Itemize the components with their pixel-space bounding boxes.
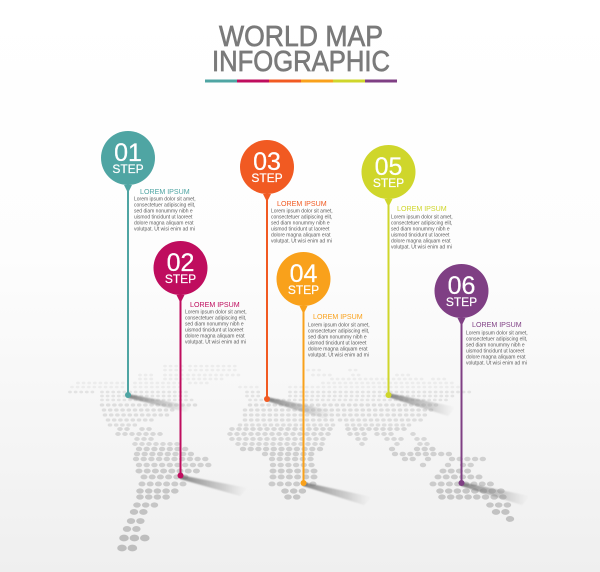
pin 05: STEP — [373, 176, 404, 190]
pin 06: STEP — [446, 295, 477, 309]
text block 04 — [308, 313, 370, 359]
text block 04: consectetuer adipiscing elit, — [308, 329, 369, 335]
text block 01 — [134, 188, 196, 233]
text block 04: Lorem ipsum dolor sit amet, — [308, 323, 370, 329]
text block 05: uismod tincidunt ut laoreet — [391, 233, 450, 239]
text block 01: sed diam nonummy nibh e — [134, 209, 193, 215]
text block 02: volutpat. Ut wisi enim ad mi — [185, 340, 246, 346]
text block 01: Lorem ipsum dolor sit amet, — [134, 197, 196, 203]
text block 01: LOREM IPSUM — [140, 188, 190, 196]
pin 02: STEP — [165, 272, 196, 286]
text block 04: LOREM IPSUM — [313, 313, 363, 321]
pin 06: 06 — [448, 272, 475, 300]
text block 02: dolore magna aliquam erat — [185, 334, 245, 340]
pin 05: 05 — [375, 153, 402, 181]
text block 02: Lorem ipsum dolor sit amet, — [185, 310, 247, 316]
text block 04: volutpat. Ut wisi enim ad mi — [308, 353, 369, 359]
text block 04: dolore magna aliquam erat — [308, 347, 368, 353]
text block 03: sed diam nonummy nibh e — [271, 221, 330, 227]
text block 06: sed diam nonummy nibh e — [466, 343, 525, 349]
text block 01: consectetuer adipiscing elit, — [134, 203, 195, 209]
text block 03: uismod tincidunt ut laoreet — [271, 227, 330, 233]
text block 06: volutpat. Ut wisi enim ad mi — [466, 361, 527, 367]
title: WORLD MAP — [219, 21, 383, 53]
text block 04: uismod tincidunt ut laoreet — [308, 341, 367, 347]
pin 06 — [434, 264, 488, 486]
text block 01: uismod tincidunt ut laoreet — [134, 215, 193, 221]
pin 01: 01 — [114, 139, 142, 167]
text block 01: dolore magna aliquam erat — [134, 221, 194, 227]
text block 06: consectetuer adipiscing elit, — [466, 337, 527, 343]
pin 03: 03 — [253, 148, 281, 176]
text block 03: volutpat. Ut wisi enim ad mi — [271, 239, 332, 245]
text block 05: Lorem ipsum dolor sit amet, — [391, 215, 453, 221]
text block 05: sed diam nonummy nibh e — [391, 227, 450, 233]
text block 02: uismod tincidunt ut laoreet — [185, 328, 244, 334]
text block 02: consectetuer adipiscing elit, — [185, 316, 246, 322]
text block 05: dolore magna aliquam erat — [391, 239, 451, 245]
text block 06 — [466, 321, 528, 367]
text block 03: consectetuer adipiscing elit, — [271, 215, 332, 221]
pin 02: 02 — [167, 249, 194, 277]
text block 01: volutpat. Ut wisi enim ad mi — [134, 227, 195, 233]
text block 03: LOREM IPSUM — [277, 200, 327, 208]
pin 01 — [101, 131, 155, 398]
text block 03 — [271, 200, 333, 245]
colour bar under title — [205, 80, 397, 82]
title: INFOGRAPHIC — [212, 46, 390, 78]
text block 05: volutpat. Ut wisi enim ad mi — [391, 245, 452, 251]
text block 03: dolore magna aliquam erat — [271, 233, 331, 239]
title — [212, 21, 390, 78]
pin 02 — [154, 241, 208, 478]
pin 04: STEP — [288, 283, 319, 297]
pin shadows — [128, 393, 530, 505]
text block 05: consectetuer adipiscing elit, — [391, 221, 452, 227]
pin 04 — [276, 252, 330, 486]
pin 05 — [362, 145, 416, 398]
pin 01: STEP — [112, 162, 144, 176]
text block 06: LOREM IPSUM — [472, 321, 522, 329]
text block 02 — [185, 301, 247, 346]
pin 03: STEP — [251, 171, 283, 185]
text block 05 — [391, 205, 453, 251]
dotted world map — [70, 366, 516, 548]
pin 03 — [240, 140, 294, 402]
pin 04: 04 — [290, 260, 317, 288]
text block 03: Lorem ipsum dolor sit amet, — [271, 209, 333, 215]
text block 06: dolore magna aliquam erat — [466, 355, 526, 361]
text block 02: sed diam nonummy nibh e — [185, 322, 244, 328]
text block 06: Lorem ipsum dolor sit amet, — [466, 331, 528, 337]
text block 06: uismod tincidunt ut laoreet — [466, 349, 525, 355]
text block 02: LOREM IPSUM — [190, 301, 240, 309]
text block 05: LOREM IPSUM — [397, 205, 447, 213]
text block 04: sed diam nonummy nibh e — [308, 335, 367, 341]
